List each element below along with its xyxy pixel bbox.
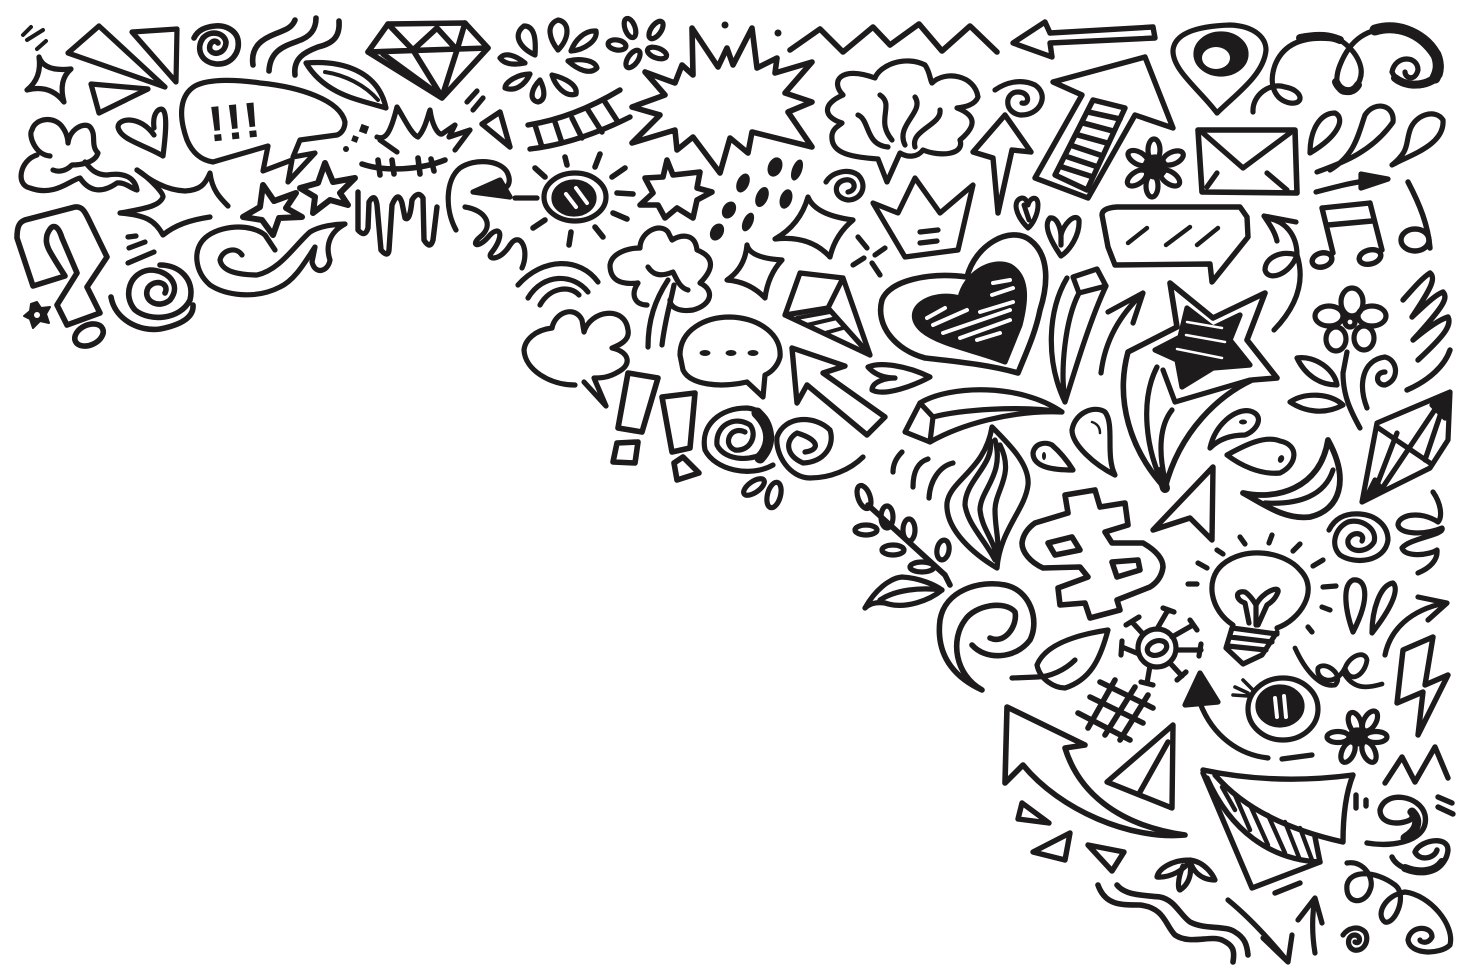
icon: small sparkle [727, 245, 782, 298]
icon: tear drops [1033, 409, 1294, 475]
icon: dark spiral [704, 408, 773, 471]
icon: swirl arrow [197, 224, 345, 295]
icon: veined leaf [1012, 630, 1108, 688]
icon: comma curls [1367, 797, 1453, 872]
arrow: curly arrow [1264, 216, 1300, 330]
icon: envelope [1198, 130, 1297, 193]
icon: bottom flower [1327, 708, 1387, 765]
icon: large sparkle [775, 197, 853, 257]
icon: curly scribble [465, 207, 525, 268]
icon: three drops [1310, 106, 1443, 172]
icon: sail triangle [1107, 725, 1173, 808]
icon: outlined heart [118, 109, 166, 156]
icon: bottom small spiral [1343, 928, 1367, 950]
arrow: thin up arrow [1298, 898, 1322, 953]
icon: leafy branch [854, 484, 951, 585]
icon: virus [1121, 608, 1201, 685]
icon: dark flower [1125, 139, 1186, 197]
icon: scattered triangles [1018, 803, 1124, 871]
icon: eye [1233, 678, 1318, 740]
icon: sun [533, 154, 633, 245]
icon: jagged burst [120, 170, 228, 235]
icon: triangle shards [68, 26, 177, 113]
icon: small dark heart [1016, 198, 1038, 228]
icon: rainbow arcs [518, 264, 598, 305]
icon: dotted trail [343, 124, 369, 152]
icon: large spiral [939, 584, 1034, 690]
icon: kite diamond [1362, 392, 1450, 502]
icon: crystal column [1051, 269, 1106, 402]
arrow: big outlined sweeping arrow [1005, 707, 1185, 836]
icon: rain dashes [707, 155, 805, 243]
icon: outline heart [1047, 218, 1079, 256]
icon: crown burst [377, 107, 470, 152]
icon: left spiral [111, 265, 193, 329]
icon: ladder [528, 90, 630, 149]
icon: location pin [1173, 25, 1266, 113]
icon: striped leaf [947, 427, 1028, 568]
icon: question mark [17, 207, 107, 350]
icon: heart leaf [868, 365, 930, 392]
speech bubble with exclamation marks [182, 80, 345, 182]
arrow: diagonal down arrow [1228, 900, 1292, 962]
arrow: thin rising arrow [1101, 293, 1143, 373]
icon: small triangle and dashes [467, 91, 510, 147]
icon: small dashes [23, 27, 46, 49]
arrow: solid-head curved arrow [1185, 673, 1312, 759]
icon: crescent [1243, 440, 1340, 517]
icon: dollar sign [1022, 490, 1163, 618]
icon: small spiral [826, 171, 863, 200]
icon: cloud with wavy tail [21, 120, 137, 191]
arrow: big striped up arrow [1035, 57, 1173, 198]
icon: drop ring [500, 20, 597, 102]
arrow: left arrow [1013, 22, 1155, 57]
icon: 3D bar [905, 390, 1062, 442]
icon: shooting star [1123, 283, 1277, 488]
speech bubble with exclamation marks: !!! [205, 91, 264, 153]
icon: loops [1295, 648, 1382, 687]
icon: sparkle dashes [853, 237, 885, 275]
icon: top spiral [194, 26, 238, 64]
icon: corner scribble [1398, 492, 1442, 573]
icon: motion arcs [893, 452, 953, 498]
icon: brain cloud [827, 61, 978, 182]
icon: small twin drops [741, 476, 784, 509]
arrow: curved up-right arrow [1385, 597, 1447, 655]
icon: zigzag [790, 24, 997, 52]
icon: tree cloud [610, 228, 710, 347]
icon: dashes above spiral [128, 236, 154, 263]
icon: double wavy line [1098, 885, 1248, 962]
arrow: outlined up-left arrow [792, 348, 885, 435]
icon: exclamation marks [613, 373, 699, 480]
icon: crown [873, 178, 973, 257]
icon: sparkle [27, 57, 71, 102]
arrow: small up arrow [973, 115, 1031, 213]
icon: hash grid [1078, 680, 1153, 740]
icon: comic burst [632, 22, 812, 173]
icon: right spiral [1329, 514, 1388, 560]
icon: right spiral with tail [777, 420, 863, 478]
icon: folded ribbon [1203, 770, 1366, 893]
icon: twin tall drops [1346, 580, 1395, 633]
icon: small filled star [24, 302, 50, 328]
icon: beamed music notes [1311, 203, 1382, 269]
icon: stitched line [362, 158, 445, 175]
icon: dotted speech bubble [680, 317, 780, 397]
icon: paper arrow [1153, 467, 1213, 540]
icon: paint drips [358, 192, 437, 254]
icon: leaf [306, 63, 386, 108]
arrow: hook arrow [448, 162, 537, 230]
icon: single music note [1401, 182, 1430, 251]
icon: two stars [243, 163, 355, 235]
icon: lightning bolt [1397, 637, 1448, 735]
icon: light bulb [1188, 535, 1336, 664]
icon: gem [785, 273, 870, 355]
icon: wing scribble [1403, 273, 1450, 390]
icon: bottom corner curls [1347, 863, 1451, 952]
icon: diamond [368, 23, 488, 98]
arrow: small right arrow [1316, 174, 1388, 192]
icon: striped heart [881, 235, 1046, 373]
icon: looping flourish [1253, 26, 1441, 112]
speech box with slashes [1102, 207, 1248, 282]
icon: small petal flower [607, 17, 668, 70]
icon: flower plant [1290, 288, 1396, 428]
icon: lower leaf [865, 577, 942, 608]
icon: tailed cloud bubble [524, 312, 628, 406]
icon: M zigzag [1385, 747, 1448, 783]
icon: leaf sprout [1157, 860, 1215, 890]
icon: outlined star [640, 160, 712, 218]
icon: three wavy lines [253, 18, 339, 75]
icon: concentric swirl [995, 82, 1042, 115]
